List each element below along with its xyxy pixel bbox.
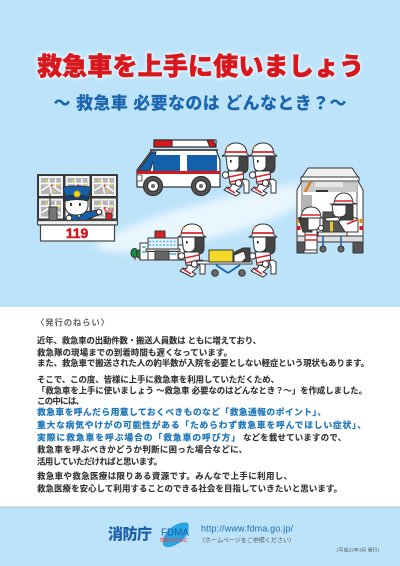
illustration: hospital building: [131, 231, 188, 260]
paragraph 1: また、救急車で搬送された人の約半数が入院を必要としない軽症という現状もあります。: [37, 358, 369, 368]
stretcher at rear: [318, 232, 347, 252]
illustration: ambulance side view: [137, 140, 220, 196]
highlighted blue text: 重大な病気やけがの可能性がある「ためらわず救急車を呼んでほしい症状」、: [37, 419, 366, 430]
title: 救急車を上手に使いましょう: [37, 53, 364, 81]
desk: [38, 220, 118, 241]
paragraph 2: [37, 374, 367, 406]
illustration: paramedics with stretcher and patient: [178, 224, 277, 277]
paragraph 3: [37, 432, 346, 466]
footer: FDMA logo: [160, 522, 189, 547]
illustration: ambulance rear with crew: [297, 168, 363, 253]
background swoosh: [93, 183, 300, 252]
paramedic at rear, lower: [298, 207, 324, 253]
footer: agency name: 消防庁: [108, 525, 152, 543]
map monitors wall: [37, 174, 118, 221]
footer: homepage note: （ホームページをご参照ください）: [199, 536, 295, 544]
highlighted blue text: 実際に救急車を呼ぶ場合の「救急車の呼び方」: [37, 432, 240, 442]
subtitle: 〜 救急車 必要なのは どんなとき？〜: [54, 93, 346, 113]
illustration: 119 dispatcher at desk: [37, 174, 118, 241]
heading: purpose: 〈発行のねらい〉: [36, 318, 109, 328]
paragraph 3: 活用していただければと思います。: [37, 456, 162, 466]
paragraph 4: 救急車や救急医療は限りある資源です。みんなで上手に利用し、: [37, 471, 292, 481]
paragraph 3: などを載せていますので、: [243, 432, 346, 442]
paragraph 2: そこで、この度、皆様に上手に救急車を利用していただくため、: [37, 374, 279, 384]
paragraph 1: 近年、救急車の出動件数・搬送人員数は ともに増えており、: [37, 336, 261, 346]
alarm light: [105, 208, 113, 220]
paragraph 3: 救急車を呼ぶべきかどうか判断に困った場合などに、: [37, 444, 247, 454]
footer: FDMA logo: FDMA: [161, 526, 189, 538]
radio handset: [49, 194, 57, 221]
highlighted blue text: [37, 406, 366, 442]
paragraph 4: 救急医療を安心して利用することのできる社会を目指していきたいと思います。: [37, 484, 342, 494]
footer: website url: http://www.fdma.go.jp/: [201, 524, 293, 534]
panel: purpose text: [0, 307, 400, 507]
highlighted blue text: 救急車を呼んだら用意しておくべきものなど「救急通報のポイント」、: [37, 406, 326, 417]
footer: FDMA logo: 住民とともに: [160, 536, 188, 544]
paragraph 2: 「救急車を上手に使いましょう 〜救急車 必要なのはどんなとき？〜」を作成しました。: [37, 386, 367, 396]
paragraph 1: [37, 336, 369, 368]
paragraph 1: 救急隊の現場までの到着時間も遅くなっています。: [37, 348, 232, 358]
illustration: two paramedics running: [222, 143, 277, 196]
119 label: 119: [66, 225, 89, 241]
dispatcher in blue uniform: [63, 186, 102, 221]
paragraph 4: [37, 471, 342, 494]
paramedic at rear, upper: [325, 193, 358, 232]
footer: issue date: (平成23年3月 発行): [337, 546, 379, 554]
paragraph 2: この中には、: [37, 396, 84, 406]
title: 救急車を上手に使いましょう: [37, 53, 364, 81]
